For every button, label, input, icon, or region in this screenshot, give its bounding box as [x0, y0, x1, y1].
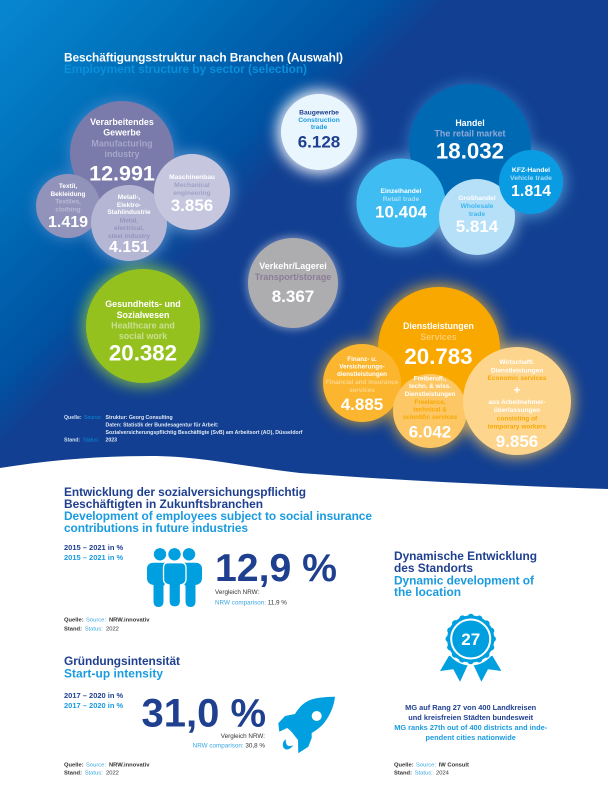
period label 2015-2021 — [64, 543, 124, 562]
bubble: Freiberufl., techn. & wiss. Dienstleistungen: 6.042 — [409, 423, 451, 442]
bubble: Freiberufl., techn. & wiss. Dienstleistungen — [393, 374, 467, 448]
bubble: Verkehr/Lagerei: Verkehr/Lagerei — [259, 261, 327, 271]
source note: employees: NRW.innovativ — [109, 618, 150, 624]
bubble: Finanz- u. Versicherungsdienstleistungen: Financial and insurance — [326, 379, 399, 386]
bubble: Baugewerbe — [281, 94, 357, 170]
bubble: Einzelhandel — [356, 158, 446, 248]
source note: location: 2024 — [436, 770, 450, 776]
source note: location: Quelle: — [394, 762, 414, 768]
bubble: Freiberufl., techn. & wiss. Dienstleistungen: scientific services — [403, 414, 458, 421]
source note: structure: Status: — [83, 438, 99, 444]
heading: start-up intensity — [64, 654, 180, 680]
bubble: Textil, Bekleidung: 1.419 — [48, 214, 88, 231]
bubble: Freiberufl., techn. & wiss. Dienstleistungen: techn. & wiss. — [409, 383, 451, 390]
bubble: Großhandel: Wholesale — [460, 203, 494, 210]
bubble: Großhandel — [439, 179, 515, 255]
source note: employees: Status: — [85, 627, 103, 633]
bubble: Gesundheits- und Sozialwesen: social work — [119, 331, 167, 341]
source note: structure: Stand: — [64, 438, 80, 444]
bubble: Dienstleistungen: 20.783 — [404, 344, 473, 369]
period label 2017-2020 — [64, 691, 124, 710]
source note: employees: 2022 — [106, 627, 119, 633]
stat: 31,0 %: NRW comparison: 30,8 % — [193, 742, 265, 750]
heading: development of employees — [64, 485, 372, 535]
source note: structure: Struktur: Georg Consulting — [106, 415, 173, 421]
bubble: Wirtschaftl. Dienstleistungen: aus Arbeitnehmer- — [488, 399, 546, 406]
bubble: KFZ-Handel — [499, 150, 563, 214]
bubble: Metall-, Elektro-, Stahlindustrie — [91, 185, 167, 261]
bubble: Wirtschaftl. Dienstleistungen — [463, 347, 571, 455]
bubble group: services — [323, 287, 571, 455]
stat: 12,9 %: Vergleich NRW: — [215, 589, 259, 596]
bubble: Maschinenbau: Mechanical — [174, 182, 210, 189]
source note: location: Source: — [416, 762, 436, 768]
heading: dynamic development: Dynamische Entwicklung — [394, 549, 537, 563]
source note: employees: Source: — [86, 618, 106, 624]
bubble: Maschinenbau — [154, 154, 230, 230]
bubble: Metall-, Elektro-, Stahlindustrie: Metall-, — [118, 194, 140, 201]
bubble: Verarbeitendes Gewerbe — [70, 101, 174, 205]
bubble: Verkehr/Lagerei: Transport/storage — [255, 272, 331, 282]
title: employment structure: Beschäftigungsstruktur nach Branchen (Auswahl) — [64, 50, 343, 64]
source note: start-up — [64, 762, 150, 776]
text: ranking statement: und kreisfreien Städten bundesweit — [408, 713, 534, 722]
bubble: Textil, Bekleidung: Textil, — [59, 183, 77, 190]
source note: employees: Stand: — [64, 627, 82, 633]
bubble: Wirtschaftl. Dienstleistungen: consisting of — [497, 416, 538, 422]
bubble: Freiberufl., techn. & wiss. Dienstleistungen: Freiberufl., — [414, 376, 447, 382]
bubble: Handel: Handel — [455, 118, 485, 128]
period label 2015-2021: 2015 – 2021 in % — [64, 553, 124, 562]
source note: structure: 2023 — [106, 438, 117, 444]
bubble: Textil, Bekleidung: clothing — [55, 206, 81, 214]
icon: rocket — [278, 697, 335, 753]
bubble: Verarbeitendes Gewerbe: Manufacturing — [91, 138, 153, 148]
title: employment structure — [64, 50, 343, 76]
bubble: Verkehr/Lagerei — [248, 238, 338, 328]
stat: 31,0 %: 31,0 % — [142, 692, 266, 736]
heading: dynamic development: des Standorts — [394, 561, 473, 575]
bubble: Finanz- u. Versicherungsdienstleistungen: Finanz- u. — [347, 356, 377, 363]
bubble: Maschinenbau: Maschinenbau — [169, 174, 215, 181]
bubble: Freiberufl., techn. & wiss. Dienstleistungen: Dienstleistungen — [405, 391, 456, 398]
bubble: Wirtschaftl. Dienstleistungen: Wirtschaftl. — [499, 359, 535, 366]
source note: start-up: 2022 — [106, 770, 119, 776]
bubble: Wirtschaftl. Dienstleistungen: Economic services — [488, 375, 547, 382]
heading: development of employees: contributions in future industries — [64, 521, 248, 535]
heading: dynamic development: Dynamic development of — [394, 574, 534, 588]
bubble: Maschinenbau: engineering — [173, 190, 211, 197]
bubble: Einzelhandel: 10.404 — [375, 203, 428, 222]
bubble: Finanz- u. Versicherungsdienstleistungen: services — [349, 387, 375, 394]
stat: 12,9 %: 12,9 % — [215, 547, 337, 590]
glow halos behind bubbles — [35, 83, 574, 458]
text: ranking statement — [394, 703, 548, 742]
bubble: Gesundheits- und Sozialwesen: Gesundheits- und — [105, 299, 181, 309]
bubble: Finanz- u. Versicherungsdienstleistungen: 4.885 — [341, 395, 383, 414]
text: ranking statement: MG auf Rang 27 von 400 Landkreisen — [405, 703, 537, 712]
source note: location: IW Consult — [439, 762, 469, 768]
bubble: KFZ-Handel: 1.814 — [511, 183, 551, 200]
bubble: Gesundheits- und Sozialwesen: Sozialwesen — [117, 310, 169, 320]
source note: start-up: NRW.innovativ — [109, 762, 150, 768]
bubble: Großhandel: trade — [469, 211, 485, 218]
source note: start-up: Quelle: — [64, 762, 84, 768]
source note: location: Status: — [415, 770, 433, 776]
bubble: Wirtschaftl. Dienstleistungen: + — [513, 383, 521, 397]
bubble: Handel: 18.032 — [436, 139, 504, 164]
bubble: Verarbeitendes Gewerbe: Verarbeitendes — [90, 117, 154, 127]
source note: employees — [64, 618, 150, 633]
bubble group: trade — [356, 84, 563, 255]
bubble: Metall-, Elektro-, Stahlindustrie: Metal, — [120, 218, 138, 224]
bubble: Baugewerbe: Baugewerbe — [299, 110, 339, 116]
bubble: Verarbeitendes Gewerbe: 12.991 — [89, 162, 155, 186]
source note: employees: Quelle: — [64, 618, 84, 624]
bubble: Wirtschaftl. Dienstleistungen: 9.856 — [496, 432, 538, 451]
bubble: Handel: The retail market — [434, 128, 506, 138]
blue header background with wave — [0, 0, 608, 489]
icon: people group — [147, 548, 202, 607]
source note: location — [394, 762, 469, 776]
bubble: Einzelhandel: Retail trade — [383, 196, 419, 203]
bubble: Textil, Bekleidung: Textiles, — [55, 198, 81, 206]
stat: 31,0 %: Vergleich NRW: — [221, 733, 265, 740]
heading: development of employees: Development of employees subject to social insurance — [64, 509, 372, 523]
bubble: KFZ-Handel: KFZ-Handel — [512, 167, 550, 174]
period label 2017-2020: 2017 – 2020 in % — [64, 691, 124, 700]
bubble: Wirtschaftl. Dienstleistungen: temporary workers — [488, 424, 547, 430]
period label 2015-2021: 2015 – 2021 in % — [64, 543, 124, 552]
source note: structure: Quelle: — [64, 415, 82, 421]
bubble: Gesundheits- und Sozialwesen: Healthcare and — [111, 320, 175, 330]
heading: start-up intensity: Start-up intensity — [64, 666, 163, 680]
heading: dynamic development — [394, 549, 537, 599]
bubble: Baugewerbe: 6.128 — [298, 132, 340, 151]
bubble: Finanz- u. Versicherungsdienstleistungen: Versicherungs- — [339, 364, 385, 370]
bubble: Gesundheits- und Sozialwesen: 20.382 — [109, 341, 177, 366]
bubble: Baugewerbe: Construction — [298, 117, 340, 124]
title: employment structure: Employment structure by sector (selection) — [64, 62, 307, 76]
bubble: Metall-, Elektro-, Stahlindustrie: steel industry — [108, 233, 151, 240]
stat: 12,9 %: NRW comparison: 11,9 % — [215, 600, 287, 607]
bubble group: manufacturing — [36, 101, 230, 261]
source note: structure: Daten: Statistik der Bundesagentur für Arbeit: — [106, 422, 219, 428]
bubble: Textil, Bekleidung — [36, 174, 100, 238]
bubble: Handel — [409, 84, 531, 206]
bubble: Finanz- u. Versicherungsdienstleistungen: dienstleistungen — [337, 371, 387, 378]
source note: start-up: Stand: — [64, 770, 82, 776]
bubble: Verkehr/Lagerei: 8.367 — [272, 287, 314, 306]
source note: location: Stand: — [394, 770, 412, 776]
icon: rank badge 27 — [440, 612, 501, 682]
text: ranking statement: pendent cities nationwide — [426, 733, 516, 742]
bubble: Großhandel: Großhandel — [458, 195, 496, 202]
bubble: Dienstleistungen: Dienstleistungen — [403, 321, 474, 331]
bubble: Einzelhandel: Einzelhandel — [381, 188, 422, 195]
bubble: Freiberufl., techn. & wiss. Dienstleistungen: technical & — [413, 406, 447, 414]
bubble: Metall-, Elektro-, Stahlindustrie: 4.151 — [109, 239, 149, 256]
bubble: Maschinenbau: 3.856 — [171, 196, 213, 215]
bubble: Verarbeitendes Gewerbe: industry — [104, 149, 140, 159]
bubble: Metall-, Elektro-, Stahlindustrie: electrical, — [114, 225, 144, 232]
source note: start-up: Source: — [86, 762, 106, 768]
bubble: Dienstleistungen: Services — [420, 332, 457, 342]
heading: start-up intensity: Gründungsintensität — [64, 654, 180, 668]
bubble: Metall-, Elektro-, Stahlindustrie: Elektro- — [117, 202, 141, 209]
bubble: Gesundheits- und Sozialwesen — [86, 269, 200, 383]
heading: dynamic development: the location — [394, 585, 461, 599]
icon: rank badge 27: 27 — [461, 630, 480, 649]
bubble: Metall-, Elektro-, Stahlindustrie: Stahlindustrie — [107, 209, 151, 216]
bubble: Wirtschaftl. Dienstleistungen: Dienstleistungen — [491, 368, 543, 374]
bubble: Dienstleistungen — [378, 287, 500, 409]
bubble: Großhandel: 5.814 — [456, 217, 499, 236]
bubble: Finanz- u. Versicherungsdienstleistungen — [323, 344, 401, 422]
bubble: Verarbeitendes Gewerbe: Gewerbe — [103, 128, 141, 138]
source note: structure: Source: — [84, 415, 102, 421]
bubble: KFZ-Handel: Vehicle trade — [510, 175, 552, 182]
period label 2017-2020: 2017 – 2020 in % — [64, 701, 124, 710]
source note: structure: Sozialversicherungspflichtig Beschäftigte (SvB) am Arbeitsort (AO), Düsseldorf — [106, 430, 303, 436]
bubble: Textil, Bekleidung: Bekleidung — [50, 191, 86, 198]
source note: structure — [64, 415, 303, 444]
heading: development of employees: Beschäftigten in Zukunftsbranchen — [64, 497, 263, 511]
source note: start-up: Status: — [85, 770, 103, 776]
bubble: Wirtschaftl. Dienstleistungen: überlassungen — [494, 407, 540, 414]
heading: development of employees: Entwicklung der sozialversichungspflichtig — [64, 485, 306, 499]
bubble: Baugewerbe: trade — [311, 124, 327, 131]
bubble: Freiberufl., techn. & wiss. Dienstleistungen: Freelance, — [414, 399, 446, 406]
text: ranking statement: MG ranks 27th out of 400 districts and inde- — [394, 723, 548, 732]
